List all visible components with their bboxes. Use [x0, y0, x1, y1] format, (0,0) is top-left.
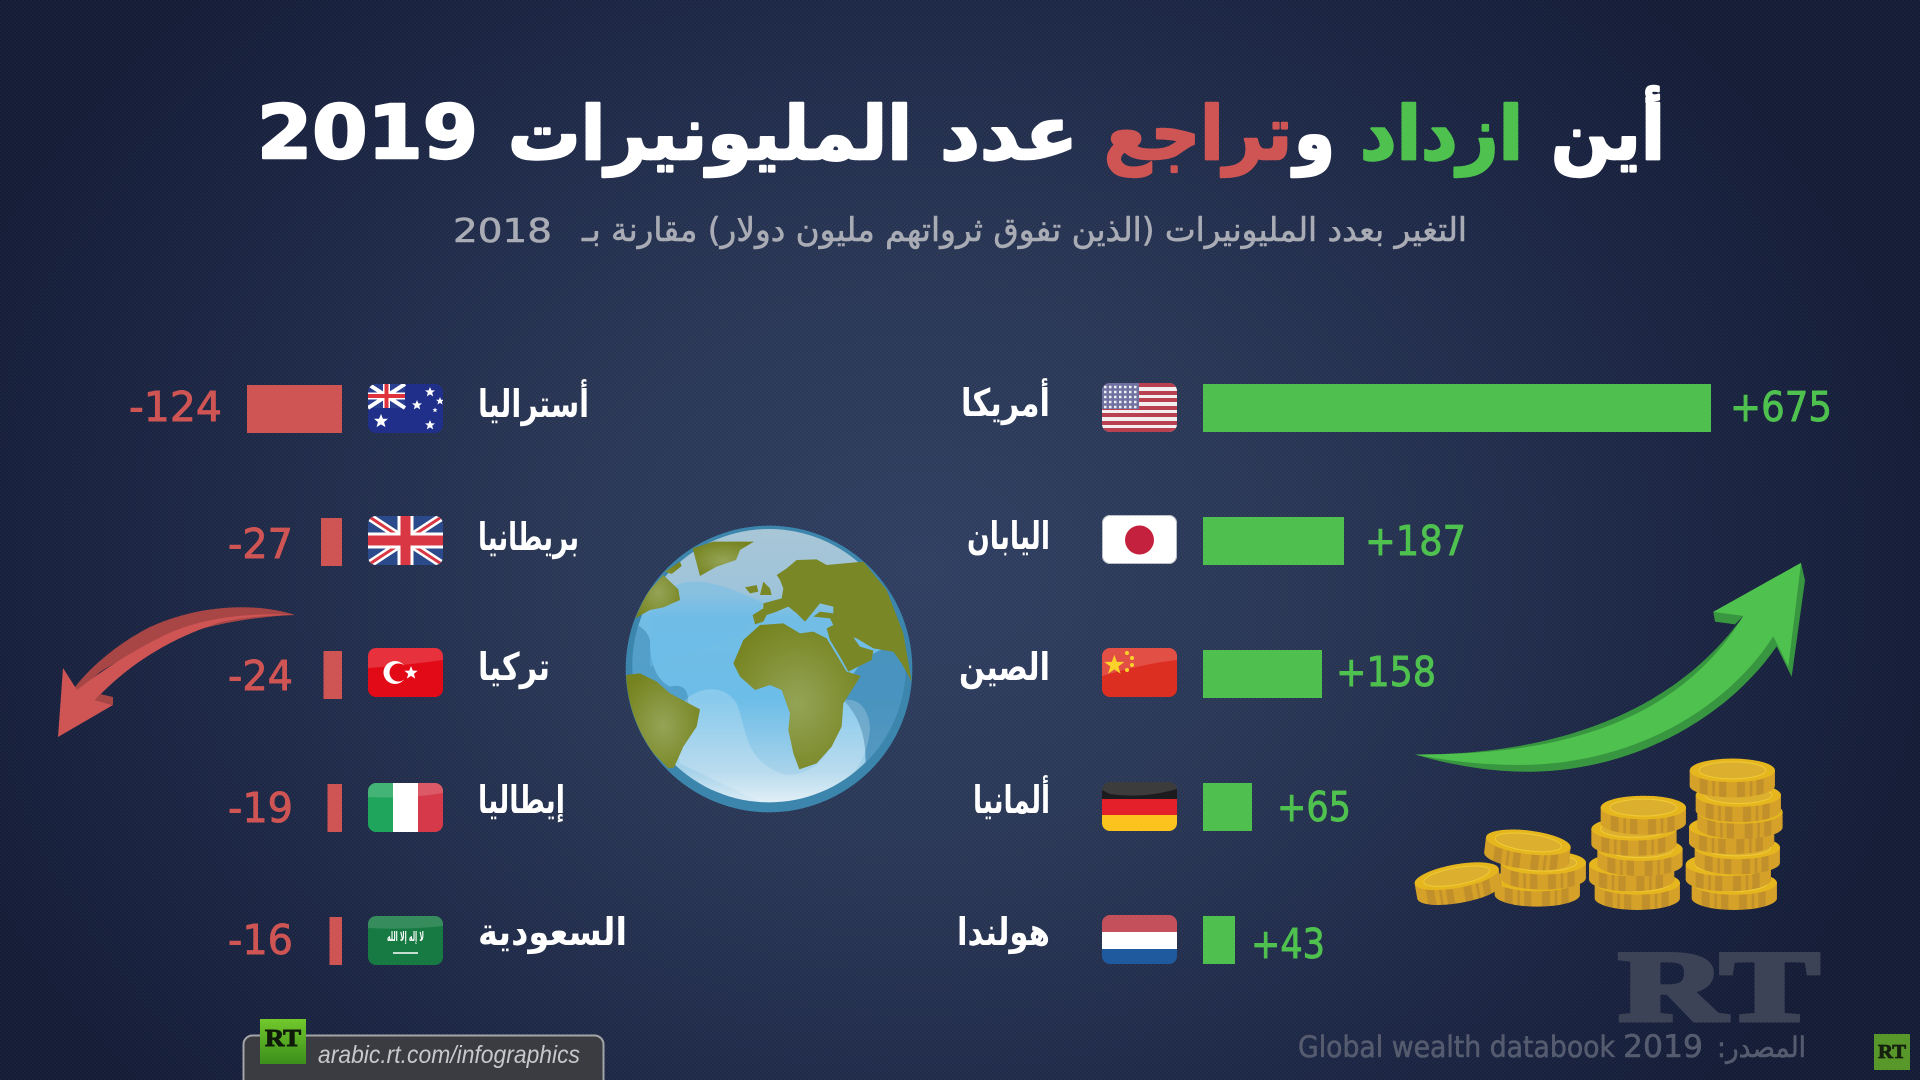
bar: China — [1203, 650, 1322, 698]
title: المليونيرات — [508, 91, 912, 178]
bar: Germany — [1203, 783, 1252, 831]
website badge — [244, 1019, 604, 1080]
watermark: RT: RT — [1619, 931, 1819, 1042]
flag: Saudi Arabia — [368, 916, 443, 965]
arrow: green up — [1415, 563, 1805, 772]
row: Italy: إيطاليا — [478, 778, 565, 823]
row: Netherlands: هولندا — [957, 910, 1050, 954]
land: South America — [626, 673, 700, 768]
row: Netherlands — [960, 915, 1322, 964]
source — [1298, 1029, 1806, 1065]
value: Japan: +187 — [1365, 517, 1466, 565]
flag: Japan — [1102, 515, 1177, 564]
row: Turkey — [228, 645, 550, 700]
flag: China — [1102, 648, 1177, 697]
bar: Australia — [247, 385, 342, 433]
row: Australia: أستراليا — [478, 379, 589, 426]
bar: Italy — [328, 784, 342, 832]
coin stack: tall — [1686, 759, 1783, 910]
bar: Japan — [1203, 517, 1344, 565]
source: Global wealth databook — [1298, 1030, 1615, 1064]
flag: UK — [368, 516, 443, 565]
bar: Saudi Arabia — [330, 917, 342, 965]
value: Germany: +65 — [1277, 783, 1351, 831]
row: UK: بريطانيا — [478, 515, 579, 559]
value: Australia: -124 — [129, 383, 222, 431]
bar: Turkey — [324, 651, 342, 699]
source: المصدر: — [1717, 1031, 1806, 1064]
bar: USA — [1203, 384, 1711, 432]
bar: Netherlands — [1203, 916, 1235, 964]
flag: Australia — [368, 384, 444, 433]
title: أين — [1551, 85, 1665, 177]
value: Netherlands: +43 — [1251, 920, 1325, 968]
flag: Netherlands — [1102, 915, 1177, 964]
title: 2019 — [257, 90, 478, 176]
row: Japan — [967, 514, 1466, 565]
coins — [1413, 759, 1783, 910]
bar: UK — [321, 518, 342, 566]
row: Italy — [230, 783, 563, 832]
row: Turkey: تركيا — [478, 645, 550, 689]
row: Germany: ألمانيا — [973, 775, 1050, 822]
title: عدد — [940, 91, 1078, 177]
coin stack: medium — [1589, 796, 1686, 910]
row: China — [959, 645, 1436, 698]
flag: Turkey — [368, 648, 443, 697]
source: 2019 — [1623, 1029, 1703, 1065]
land: Eurasia — [753, 559, 912, 682]
flag: USA — [1102, 383, 1177, 432]
website url: arabic.rt.com/infographics — [318, 1041, 580, 1069]
value: China: +158 — [1336, 648, 1436, 696]
land: British Isles — [745, 582, 772, 595]
panel: countries with decrease — [129, 379, 627, 965]
title: و — [1290, 91, 1335, 178]
logo: RT corner: RT — [1878, 1041, 1907, 1063]
value: USA: +675 — [1730, 383, 1832, 431]
flag: Germany — [1102, 782, 1177, 831]
row: Germany — [973, 775, 1351, 831]
row: Australia — [129, 379, 589, 433]
title: تراجع — [1104, 91, 1292, 177]
row: Saudi Arabia — [230, 916, 624, 965]
row: Saudi Arabia: السعودية — [478, 910, 627, 954]
arrow: red down — [58, 607, 295, 737]
land: Greenland — [693, 542, 754, 576]
globe — [623, 523, 917, 817]
coin stack: small — [1413, 825, 1586, 910]
flag: Italy — [368, 783, 443, 832]
flag: Saudi Arabia: لا إله إلا الله — [387, 930, 424, 945]
subtitle: التغير بعدد المليونيرات (الذين تفوق ثرواتهم مليون دولار) مقارنة بـ — [581, 210, 1467, 249]
logo: RT corner — [1874, 1034, 1910, 1070]
value: Saudi Arabia: -16 — [228, 916, 293, 964]
value: UK: -27 — [228, 520, 293, 568]
row: USA: أمريكا — [961, 378, 1050, 425]
land: Africa — [733, 623, 861, 769]
title — [257, 85, 1665, 178]
row: UK — [228, 515, 579, 568]
panel: countries with increase — [957, 378, 1832, 968]
title: ازداد — [1360, 91, 1523, 177]
value: Italy: -19 — [228, 784, 293, 832]
row: USA — [961, 378, 1832, 432]
logo: RT green — [260, 1019, 306, 1064]
row: Japan: اليابان — [967, 514, 1050, 558]
value: Turkey: -24 — [228, 652, 293, 700]
logo: RT green: RT — [265, 1026, 301, 1052]
row: China: الصين — [959, 645, 1050, 689]
land: North America — [635, 562, 682, 618]
subtitle: 2018 — [453, 211, 552, 250]
